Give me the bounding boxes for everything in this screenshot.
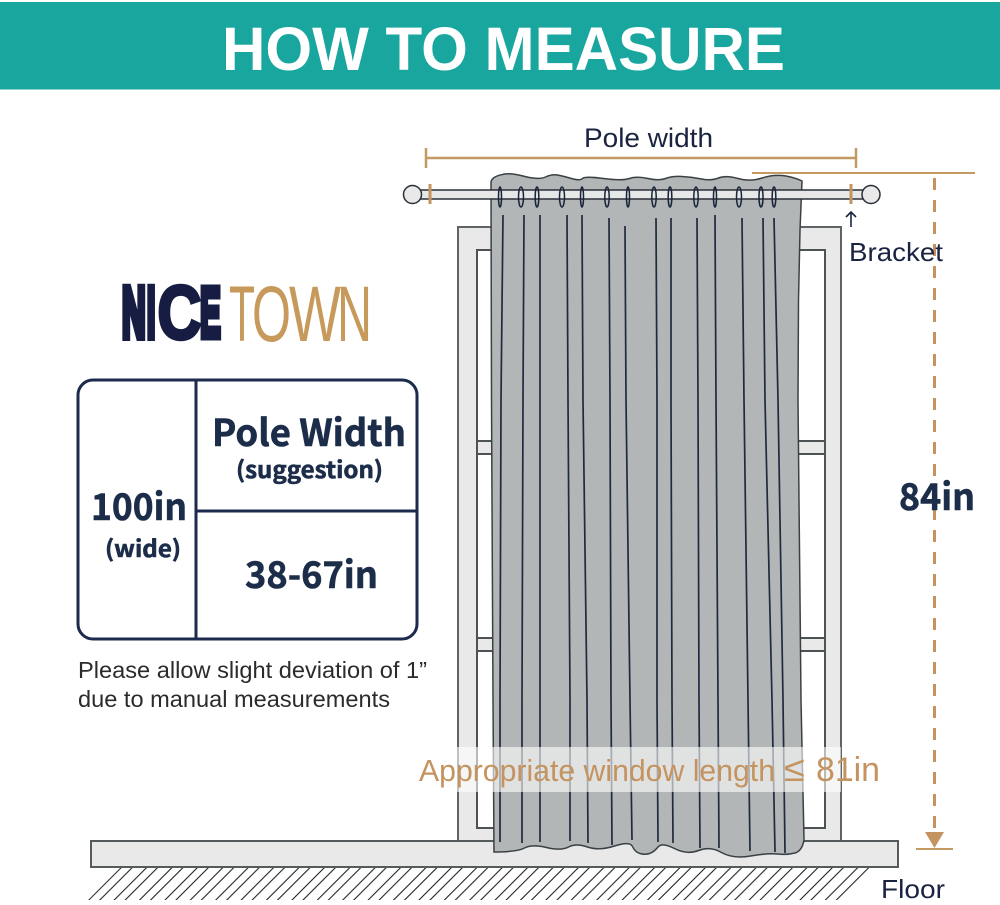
window length callout: Appropriate window length [419, 753, 775, 788]
brand logo: E [200, 272, 221, 353]
floor hatching [88, 867, 877, 900]
floor board [91, 841, 898, 867]
curtain [491, 174, 804, 857]
window length callout: 81in [816, 751, 880, 789]
label: pole width: Pole width [584, 123, 713, 153]
curtain rings [498, 187, 776, 207]
window length callout [419, 747, 880, 792]
window frame [458, 227, 841, 841]
title banner: HOW TO MEASURE [222, 15, 785, 83]
size table: (wide) [105, 530, 181, 564]
size table: Pole Width [212, 403, 406, 457]
title banner [0, 2, 1000, 90]
size table: (suggestion) [236, 451, 383, 485]
curtain rod with finials [404, 186, 880, 207]
brand logo [122, 269, 372, 358]
brand logo: T [229, 269, 255, 358]
brand logo: O [252, 269, 291, 358]
brand logo: I [147, 273, 155, 353]
brand logo: W [289, 269, 341, 358]
window length callout: ≤ [784, 748, 805, 789]
deviation note [78, 657, 427, 712]
label: bracket: Bracket [849, 237, 944, 267]
label: floor: Floor [881, 874, 945, 904]
bracket markers [428, 184, 852, 204]
size table [78, 380, 417, 639]
deviation note: Please allow slight deviation of 1” [78, 657, 427, 683]
pole width dimension line [426, 148, 856, 168]
brand logo: N [122, 273, 146, 352]
arrow: bracket pointer [846, 212, 856, 227]
brand logo: C [158, 271, 201, 356]
brand logo: N [337, 269, 372, 358]
curtain pleats [500, 215, 785, 853]
deviation note: due to manual measurements [78, 686, 390, 712]
size table: 100in [91, 477, 187, 531]
84 inch height dimension [752, 173, 975, 849]
label: 84in: 84in [899, 467, 975, 521]
size table: 38-67in [245, 545, 378, 599]
